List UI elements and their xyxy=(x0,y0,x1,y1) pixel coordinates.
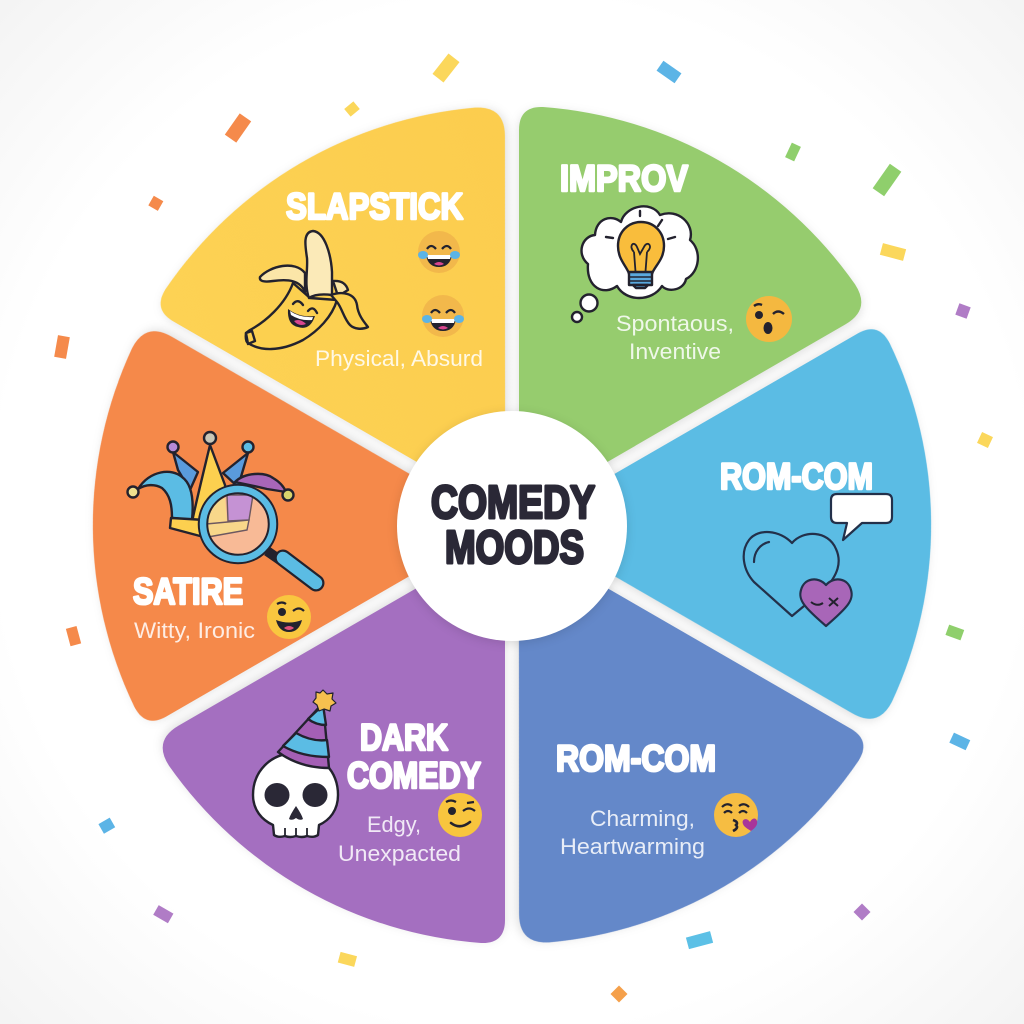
slapstick wedge xyxy=(153,13,676,513)
improv wedge xyxy=(519,107,861,513)
center hub xyxy=(397,411,627,641)
rom-com description: Charming, xyxy=(590,806,695,831)
rom-com wedge xyxy=(526,322,1024,821)
panel: rom-com indigo xyxy=(348,537,871,1024)
slapstick description: Physical, Absurd xyxy=(315,346,483,371)
emoji: laughing with tears xyxy=(422,295,464,337)
dark comedy description: Edgy, xyxy=(367,812,421,837)
emoji: winking surprised xyxy=(746,296,792,342)
dark comedy heading: COMEDY xyxy=(347,755,481,796)
rom-com description: Heartwarming xyxy=(560,834,705,859)
improv description: Spontaous, xyxy=(616,311,734,336)
dark comedy wedge xyxy=(163,537,505,943)
improv description xyxy=(616,311,734,364)
title xyxy=(431,476,595,573)
improv description: Inventive xyxy=(629,339,721,364)
emoji: blowing a kiss xyxy=(714,793,758,837)
icon: thought bubble lightbulb xyxy=(572,206,698,322)
title: COMEDY xyxy=(431,476,595,528)
satire description: Witty, Ironic xyxy=(134,618,255,643)
improv heading: IMPROV xyxy=(560,158,688,199)
rom-com heading: ROM-COM xyxy=(556,738,716,779)
icon: skull with party hat xyxy=(253,690,338,837)
rom-com description xyxy=(560,806,705,859)
emoji: laughing with tears xyxy=(418,231,460,273)
emoji: winking grin xyxy=(267,595,311,639)
icon: laughing banana xyxy=(246,231,368,349)
dark comedy description: Unexpacted xyxy=(338,841,461,866)
icon: speech bubble xyxy=(831,494,892,540)
panel: dark comedy xyxy=(163,537,505,943)
panel: improv xyxy=(519,107,861,513)
dark comedy heading xyxy=(347,717,481,796)
emoji: winking smile xyxy=(438,793,482,837)
icon: two hearts xyxy=(744,532,852,626)
slapstick heading: SLAPSTICK xyxy=(286,186,463,227)
icon: jester hat and magnifying glass xyxy=(128,432,316,583)
rom-com heading: ROM-COM xyxy=(720,456,873,497)
rom-com wedge xyxy=(348,537,871,1024)
dark comedy heading: DARK xyxy=(360,717,448,758)
panel: slapstick xyxy=(153,13,676,513)
panel: satire xyxy=(0,229,498,728)
panel: rom-com blue xyxy=(526,322,1024,821)
title: MOODS xyxy=(445,521,584,573)
dark comedy description xyxy=(338,812,461,866)
satire wedge xyxy=(0,229,498,728)
satire heading: SATIRE xyxy=(133,571,243,612)
